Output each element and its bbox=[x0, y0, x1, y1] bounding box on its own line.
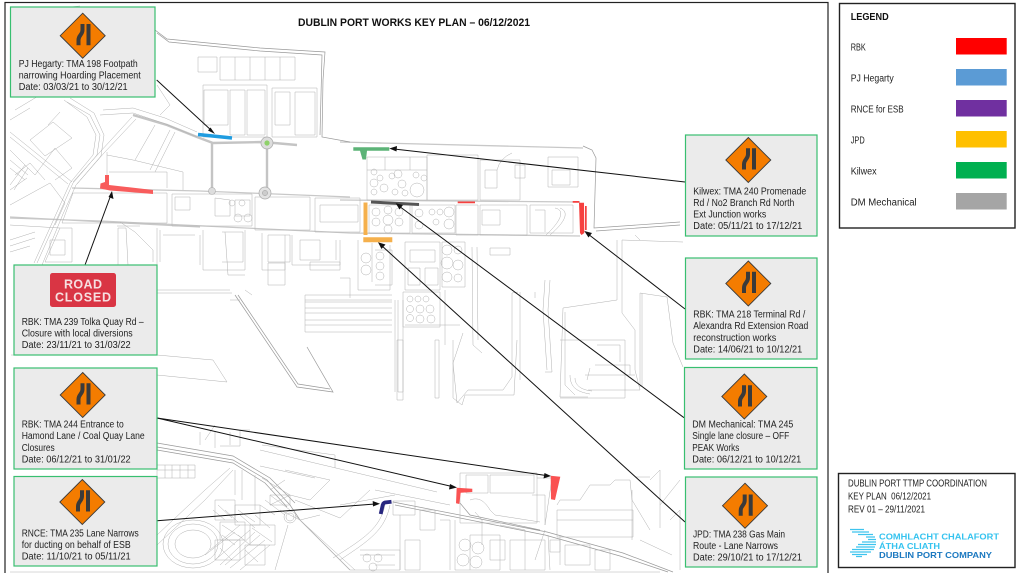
text: RBK 239 details: RBK: TMA 239 Tolka Quay Rd – bbox=[22, 317, 144, 328]
logo wordmark bbox=[879, 532, 1000, 560]
icon: road closed sign bbox=[50, 273, 116, 307]
text: RBK 239 details: Closure with local diversions bbox=[22, 328, 133, 340]
icon: road closed sign: ROAD bbox=[64, 278, 102, 292]
panel: RBK TMA 218 bbox=[686, 258, 817, 359]
text: RBK 244 details: Hamond Lane / Coal Quay Lane bbox=[22, 431, 145, 442]
text: RBK 218 details: RBK: TMA 218 Terminal Rd / bbox=[693, 310, 805, 320]
text: RNCE details: Date: 11/10/21 to 05/11/21 bbox=[22, 552, 131, 562]
site map linework bbox=[10, 6, 683, 572]
works area: DM Mechanical grey bbox=[371, 202, 419, 204]
works area: RNCE purple bbox=[381, 502, 392, 514]
text: RNCE details: for ducting on behalf of ESB bbox=[22, 540, 131, 551]
title block bbox=[838, 474, 1015, 568]
arrow: RNCE bbox=[157, 501, 380, 521]
text: RBK 218 details: Date: 14/06/21 to 10/12/21 bbox=[693, 344, 803, 356]
works area: Kilwex green bbox=[353, 147, 389, 160]
text: RBK 218 details bbox=[693, 310, 808, 356]
works area: RBK Terminal Rd red bbox=[458, 201, 587, 235]
arrow: DM Mechanical bbox=[396, 203, 684, 418]
text: RBK 239 details: Date: 23/11/21 to 31/03/22 bbox=[22, 340, 131, 351]
arrow: PJ Hegarty bbox=[157, 80, 215, 134]
legend row: Kilwex bbox=[851, 162, 1007, 178]
legend row: DM Mechanical: DM Mechanical bbox=[851, 198, 917, 208]
legend row: RBK bbox=[851, 38, 1007, 54]
legend row: JPD bbox=[851, 131, 1007, 148]
works area: RBK Hamond Lane red bbox=[456, 488, 472, 504]
text: RNCE details: RNCE: TMA 235 Lane Narrows bbox=[22, 528, 139, 540]
text: PJ Hegarty details: narrowing Hoarding Placement bbox=[19, 70, 141, 82]
text: RBK 244 details bbox=[22, 420, 145, 466]
logo wordmark: ÁTHA CLIATH bbox=[879, 541, 940, 551]
text: Kilwex details bbox=[693, 186, 807, 232]
legend row: DM Mechanical bbox=[851, 193, 1007, 210]
arrow: Kilwex bbox=[389, 146, 685, 182]
works area: RBK Tolka Quay red bbox=[100, 175, 153, 194]
icon: lane narrows sign bbox=[726, 138, 771, 182]
text: DM Mechanical details: DM Mechanical: TMA 245 bbox=[692, 420, 794, 430]
arrow: RBK Coal Quay bbox=[157, 418, 551, 478]
title: DUBLIN PORT WORKS KEY PLAN – 06/12/2021 bbox=[298, 17, 530, 29]
text: JPD details bbox=[693, 530, 802, 564]
icon: lane narrows sign bbox=[60, 480, 105, 524]
panel: RBK TMA 244 bbox=[14, 368, 157, 469]
text: RBK 244 details: Date: 06/12/21 to 31/01/22 bbox=[22, 454, 131, 466]
icon: lane narrows sign bbox=[60, 372, 105, 418]
works area: JPD orange bbox=[363, 202, 392, 242]
legend row: RNCE for ESB: RNCE for ESB bbox=[851, 104, 904, 116]
title block text: DUBLIN PORT TTMP COORDINATION bbox=[848, 478, 987, 490]
text: RBK 244 details: Closures bbox=[22, 443, 55, 454]
text: Kilwex details: Rd / No2 Branch Rd North bbox=[693, 198, 794, 209]
icon: lane narrows sign bbox=[722, 483, 768, 528]
text: JPD details: Route - Lane Narrows bbox=[693, 541, 778, 552]
text: Kilwex details: Kilwex: TMA 240 Promenade bbox=[693, 186, 807, 198]
icon: Dublin Port logo mark bbox=[850, 530, 876, 556]
legend row: PJ Hegarty bbox=[851, 69, 1007, 86]
legend heading: LEGEND bbox=[851, 12, 889, 23]
arrow: JPD bbox=[378, 242, 685, 522]
panel: JPD TMA 238 bbox=[686, 477, 817, 567]
text: RBK 239 details bbox=[22, 317, 144, 351]
text: Kilwex details: Ext Junction works bbox=[693, 210, 766, 220]
text: RNCE details bbox=[22, 528, 139, 562]
icon: lane narrows sign bbox=[722, 374, 767, 419]
arrow: RBK Tolka Quay bbox=[85, 191, 114, 265]
logo wordmark: DUBLIN PORT COMPANY bbox=[879, 550, 992, 560]
text: PJ Hegarty details: Date: 03/03/21 to 30/12/21 bbox=[19, 82, 128, 93]
icon: lane narrows sign bbox=[60, 13, 105, 58]
panel: RBK TMA 239 bbox=[14, 265, 157, 355]
text: JPD details: JPD: TMA 238 Gas Main bbox=[693, 530, 785, 540]
panel: Kilwex TMA 240 bbox=[686, 135, 817, 236]
legend row: JPD: JPD bbox=[851, 136, 865, 146]
arrow: RBK Terminal Rd bbox=[584, 231, 685, 309]
legend row: Kilwex: Kilwex bbox=[851, 166, 877, 178]
text: PJ Hegarty details: PJ Hegarty: TMA 198 Footpath bbox=[19, 59, 138, 70]
text: RBK 244 details: RBK: TMA 244 Entrance to bbox=[22, 420, 124, 430]
logo wordmark: COMHLACHT CHALAFORT bbox=[879, 532, 1000, 542]
legend row: RNCE for ESB bbox=[851, 100, 1007, 116]
panel: RNCE TMA 235 bbox=[14, 476, 157, 566]
text: JPD details: Date: 29/10/21 to 17/12/21 bbox=[693, 552, 802, 564]
text: DM Mechanical details: PEAK Works bbox=[692, 443, 739, 454]
legend row: RBK: RBK bbox=[851, 42, 866, 54]
icon: road closed sign: CLOSED bbox=[55, 290, 111, 304]
panel: PJ Hegarty TMA 198 bbox=[10, 7, 155, 97]
title block text: KEY PLAN 06/12/2021 bbox=[848, 492, 931, 502]
arrow: RBK Hamond Lane bbox=[157, 418, 457, 490]
title block text bbox=[848, 478, 987, 516]
text: DM Mechanical details bbox=[692, 420, 802, 466]
text: DM Mechanical details: Date: 06/12/21 to 10/12/21 bbox=[692, 454, 802, 466]
text: RBK 218 details: Alexandra Rd Extension Road bbox=[693, 321, 808, 332]
icon: lane narrows sign bbox=[726, 261, 771, 306]
text: Kilwex details: Date: 05/11/21 to 17/12/21 bbox=[693, 221, 803, 232]
text: DM Mechanical details: Single lane closure – OFF bbox=[692, 431, 789, 442]
text: PJ Hegarty details bbox=[19, 59, 141, 93]
text: RBK 218 details: reconstruction works bbox=[693, 333, 776, 344]
legend row: PJ Hegarty: PJ Hegarty bbox=[851, 74, 894, 84]
title block text: REV 01 – 29/11/2021 bbox=[848, 504, 925, 516]
works area: RBK Coal Quay red bbox=[551, 476, 560, 500]
panel: DM Mechanical TMA 245 bbox=[684, 368, 817, 469]
works area: PJ Hegarty blue bbox=[198, 134, 232, 138]
legend bbox=[840, 4, 1015, 228]
